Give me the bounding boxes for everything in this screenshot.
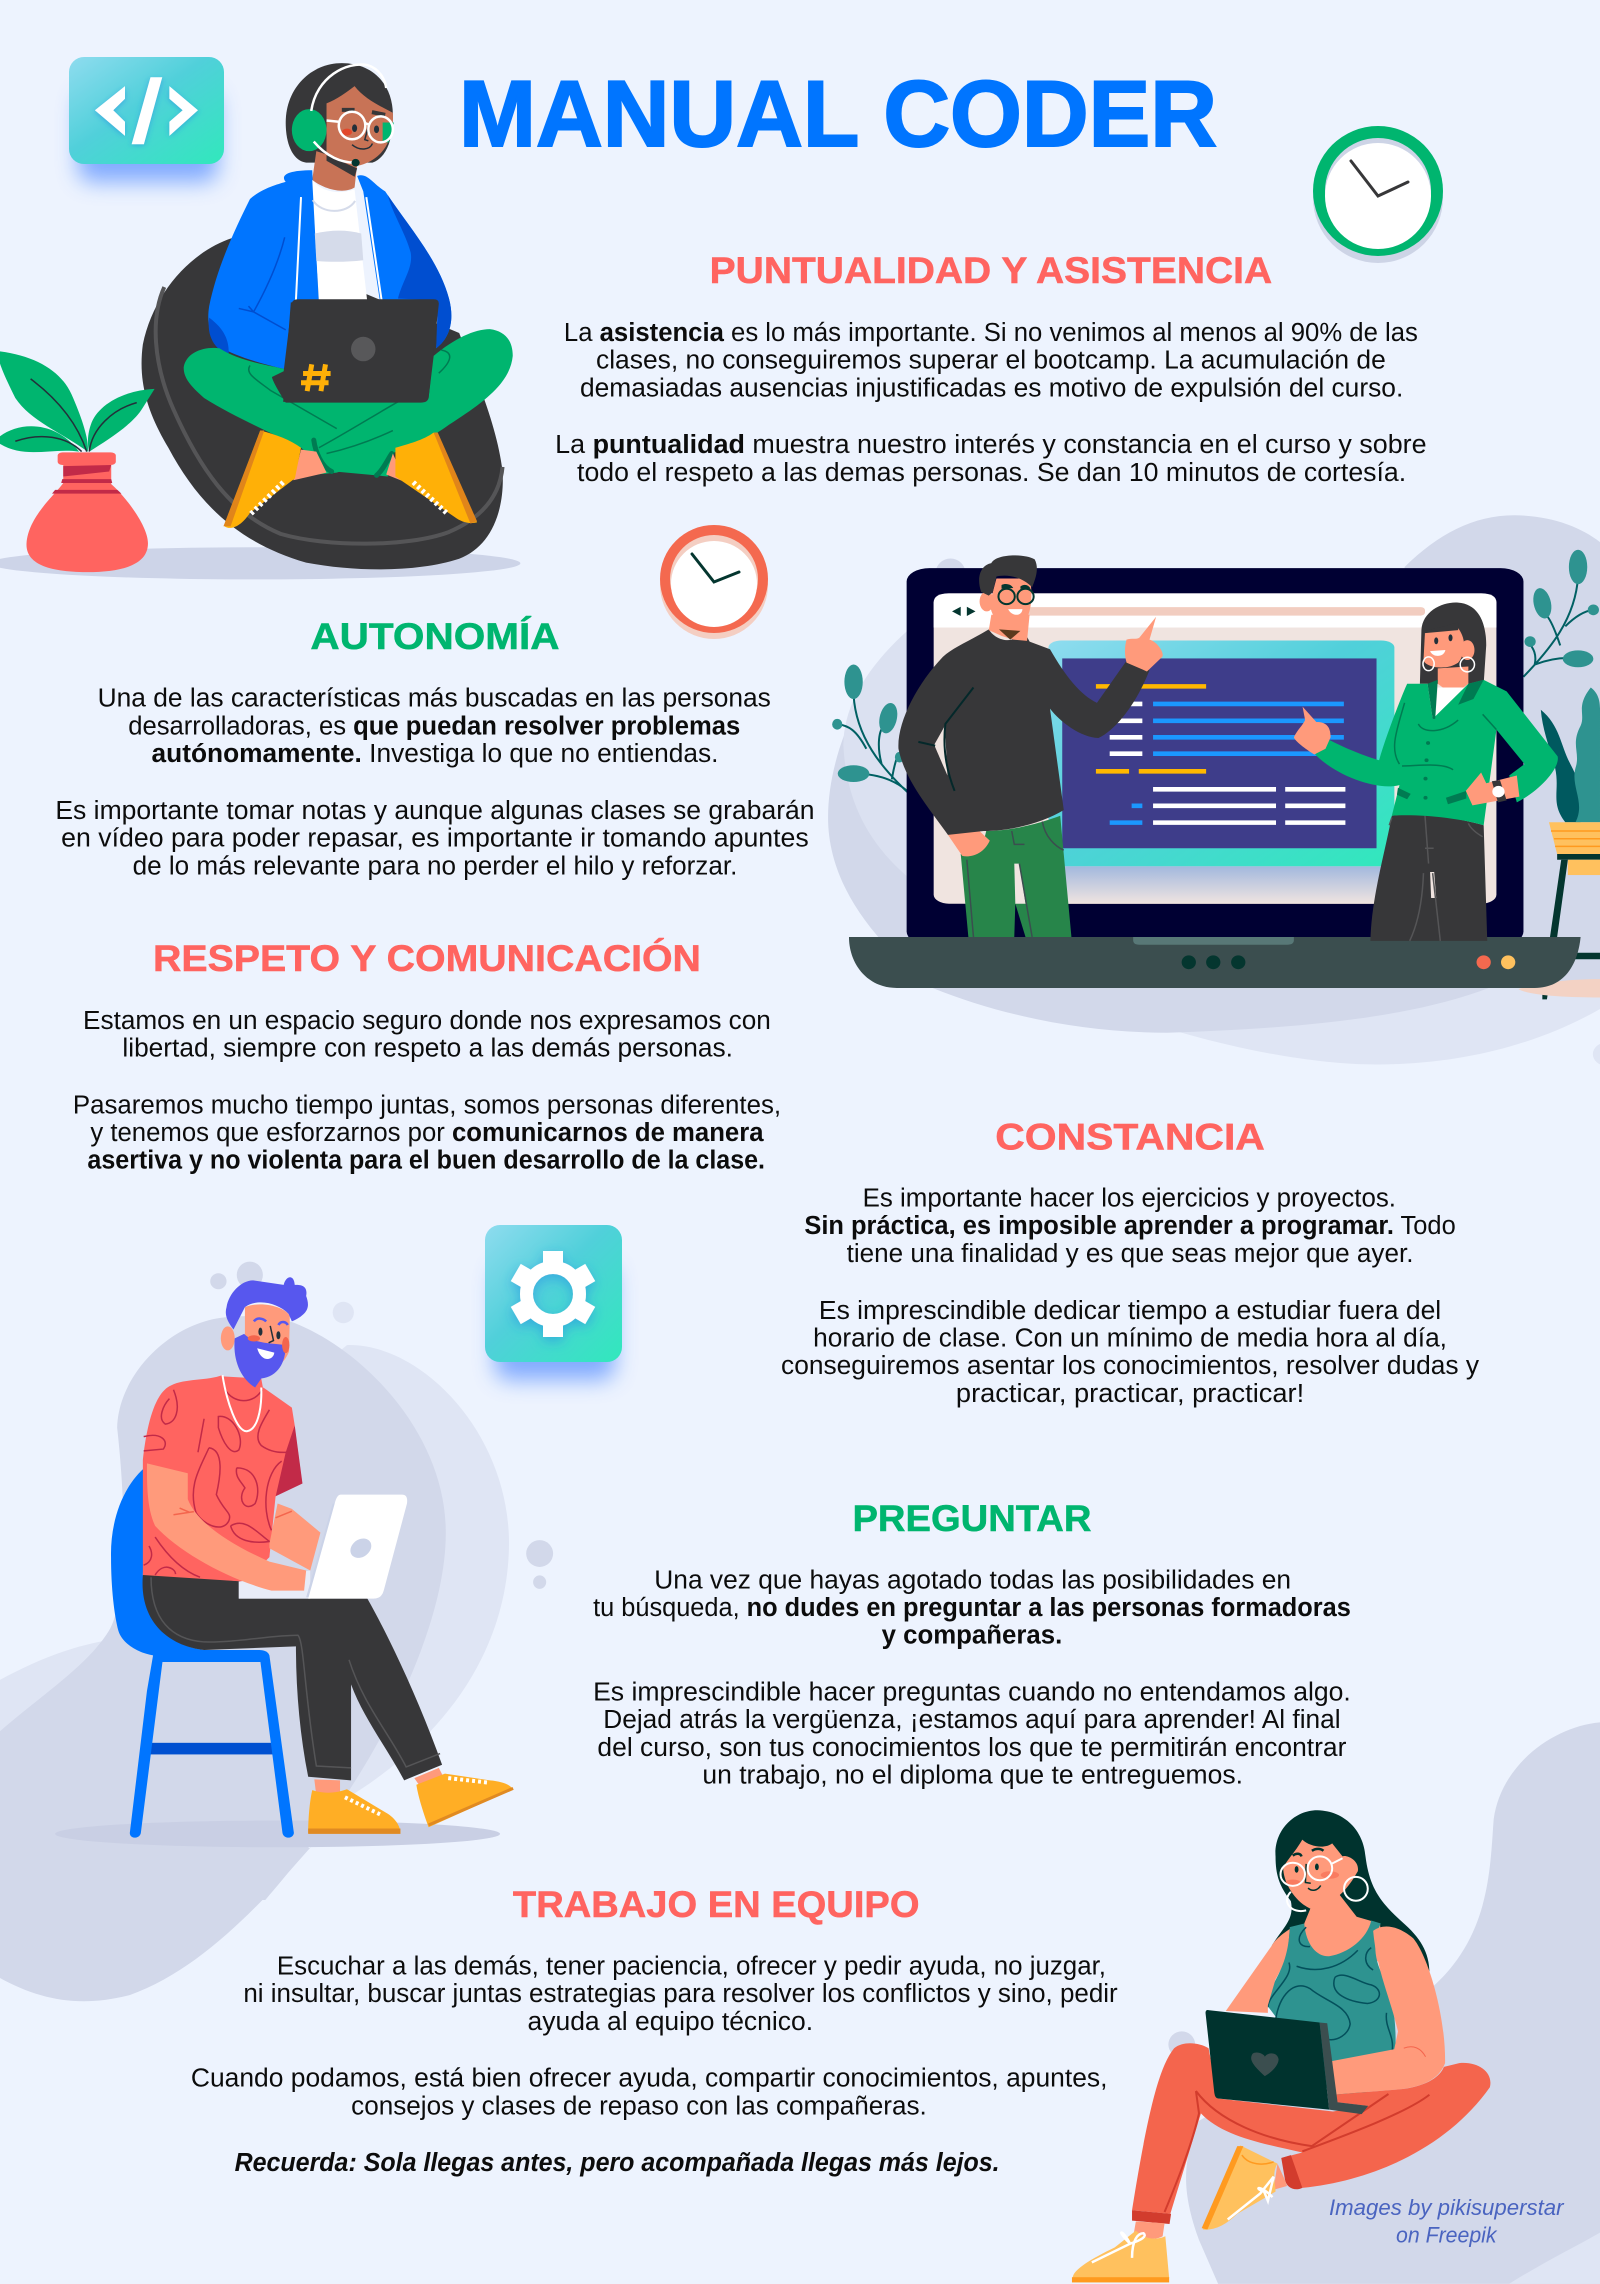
body text: autónomamente. Investiga lo que no entiendas. [152,740,718,768]
body text: Es imprescindible dedicar tiempo a estudiar fuera del [819,1297,1441,1325]
body text: Pasaremos mucho tiempo juntas, somos personas diferentes, [73,1091,781,1119]
section: puntualidad y asistencia [555,249,1427,487]
body text: asertiva y no violenta para el buen desarrollo de la clase. [87,1147,765,1175]
body text [55,685,815,880]
body text: todo el respeto a las demas personas. Se dan 10 minutos de cortesía. [577,459,1406,487]
arms [1226,1927,1445,2095]
section: constancia [781,1116,1479,1408]
heading: CONSTANCIA [995,1116,1265,1158]
image credit [1329,2195,1565,2248]
section: autonomía [55,615,815,880]
body text: Dejad atrás la vergüenza, ¡estamos aquí para aprender! Al final [603,1706,1341,1734]
body text: practicar, practicar, practicar! [956,1380,1304,1408]
head, hair and beard [221,1277,308,1431]
man in black sweater [898,555,1163,937]
body text: ayuda al equipo técnico. [528,2008,813,2036]
body text: desarrolladoras, es que puedan resolver problemas [128,712,740,740]
code lines [1096,684,1345,825]
body text: del curso, son tus conocimientos los que te permitirán encontrar [597,1734,1347,1762]
section: preguntar [593,1497,1351,1790]
body text: Recuerda: Sola llegas antes, pero acompañada llegas más lejos. [235,2149,1000,2177]
body text: Estamos en un espacio seguro donde nos expresamos con [83,1007,771,1035]
body text [191,1953,1118,2177]
body text: libertad, siempre con respeto a las demás personas. [122,1034,733,1062]
background blob: bearded man [0,1262,553,1900]
body text: Una vez que hayas agotado todas las posibilidades en [654,1566,1291,1594]
potted plant [0,351,155,572]
body text [593,1566,1351,1790]
teal top [1267,1920,1396,2102]
body text: La puntualidad muestra nuestro interés y constancia en el curso y sobre [555,431,1427,459]
body text [73,1007,781,1175]
background blob: woman with laptop [1168,1722,1600,2284]
icon: red clock [660,525,768,639]
body text: Escuchar a las demás, tener paciencia, ofrecer y pedir ayuda, no juzgar, [277,1953,1106,1981]
body text: y tenemos que esforzarnos por comunicarnos de manera [90,1119,764,1147]
floor shadow [0,547,520,579]
body text: de lo más relevante para no perder el hilo y reforzar. [133,852,737,880]
floor shadow [55,1820,500,1847]
top pattern [1268,1927,1393,2050]
title: MANUAL CODER [459,61,1217,166]
body text: conseguiremos asentar los conocimientos, resolver dudas y [781,1352,1479,1380]
arms [147,1463,320,1599]
body text: Una de las características más buscadas en las personas [98,685,771,713]
heading: PUNTUALIDAD Y ASISTENCIA [710,249,1272,291]
body text: clases, no conseguiremos superar el bootcamp. La acumulación de [596,347,1386,375]
body text: Es importante tomar notas y aunque algunas clases se grabarán [55,797,815,825]
heading: AUTONOMÍA [310,615,560,657]
woman in green jacket [1294,602,1558,941]
potted fern on stool [1518,688,1600,999]
laptop with hash sticker [272,299,439,403]
background blob: laptop [828,515,1600,1066]
body text: Es imprescindible hacer preguntas cuando no entendamos algo. [593,1679,1351,1707]
face and neck [1281,1840,1383,1968]
dark laptop [1206,2010,1368,2114]
body text: un trabajo, no el diploma que te entreguemos. [702,1762,1243,1790]
body text: demasiadas ausencias injustificadas es motivo de expulsión del curso. [580,374,1403,402]
body text: horario de clase. Con un mínimo de media hora al día, [813,1324,1447,1352]
body text: y compañeras. [882,1622,1062,1650]
image credit: Images by pikisuperstar [1329,2195,1565,2220]
heading: TRABAJO EN EQUIPO [513,1883,919,1925]
heading: RESPETO Y COMUNICACIÓN [153,937,701,979]
green crossed legs [184,329,513,476]
yellow shoes [223,431,477,528]
body text: tiene una finalidad y es que seas mejor que ayer. [847,1240,1413,1268]
icon: green clock [1313,126,1443,263]
icon: gear tile [485,1225,622,1380]
body text: Sin práctica, es imposible aprender a programar. Todo [804,1212,1456,1240]
illustration: bearded man on blue chair [55,1277,513,1847]
body text: Es importante hacer los ejercicios y proyectos. [863,1185,1396,1213]
illustration: woman with dark laptop [1072,1810,1490,2282]
shoes [1072,2145,1287,2282]
body text: La asistencia es lo más importante. Si no venimos al menos al 90% de las [564,319,1418,347]
white laptop [306,1495,407,1599]
right plant [1523,550,1599,677]
section: respeto y comunicación [73,937,781,1175]
section: trabajo en equipo [191,1883,1118,2177]
blue hoodie and shirt [208,170,451,369]
trousers [143,1575,442,1780]
patterned red shirt [143,1375,302,1582]
laptop base [849,937,1581,988]
body text: Cuando podamos, está bien ofrecer ayuda, compartir conocimientos, apuntes, [191,2065,1107,2093]
hair and head [286,63,394,191]
background blob: lower left continuation [0,1848,310,2001]
illustration: person with headset on bean bag [0,63,520,579]
image credit: on Freepik [1396,2223,1498,2248]
body text: ni insultar, buscar juntas estrategias para resolver los conflictos y sino, pedir [243,1980,1118,2008]
laptop screen [907,568,1523,945]
icon: code tile [69,57,224,182]
body text: consejos y clases de repaso con las compañeras. [351,2092,927,2120]
left plant [832,665,908,793]
body text [555,319,1427,487]
illustration: two people at giant laptop [832,550,1600,999]
blue chair [111,1466,294,1838]
hair [1272,1810,1429,1977]
bean bag [142,238,503,569]
heading: PREGUNTAR [852,1497,1091,1539]
body text [781,1185,1479,1408]
body text: tu búsqueda, no dudes en preguntar a las personas formadoras [593,1594,1351,1622]
ankles and yellow shoes [308,1768,513,1834]
body text: en vídeo para poder repasar, es importante ir tomando apuntes [61,825,809,853]
orange trousers [1132,2043,1490,2224]
